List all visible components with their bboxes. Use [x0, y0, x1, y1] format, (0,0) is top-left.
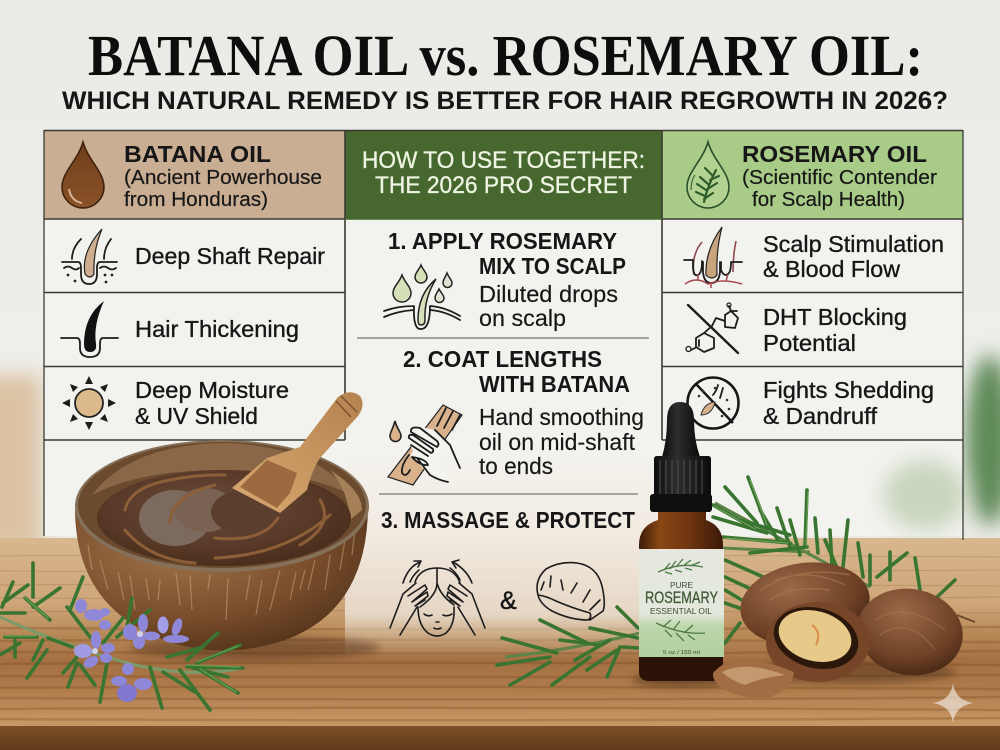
label: deep moisture: & UV Shield	[135, 403, 258, 429]
icon: scalp stimulation	[684, 227, 742, 288]
step 1 heading	[388, 228, 626, 279]
heading: batana oil: BATANA OIL	[124, 141, 271, 167]
step 2 heading	[403, 346, 630, 397]
batana column	[61, 141, 325, 430]
icon: scalp massage	[390, 560, 485, 636]
flower	[74, 631, 115, 670]
label: deep moisture: Deep Moisture	[135, 377, 289, 403]
step 2 text: oil on mid-shaft	[479, 429, 636, 455]
panel: comparison table	[44, 130, 967, 658]
wooden table	[0, 538, 1000, 750]
header: rosemary	[662, 131, 963, 219]
cap	[650, 456, 712, 512]
shea nuts	[713, 554, 970, 698]
icon: hair shaft repair	[62, 229, 117, 284]
rosemary sprigs behind bottle	[497, 477, 975, 685]
bowl rim	[75, 440, 369, 572]
flower	[123, 614, 160, 649]
rosemary sprig with flowers	[0, 563, 243, 710]
rosemary oil bottle	[632, 402, 732, 687]
pale green blur on panel	[883, 460, 967, 530]
label: deep moisture	[135, 377, 289, 429]
bowl interior	[78, 442, 366, 568]
label: scalp stimulation: Scalp Stimulation	[763, 231, 944, 257]
label: scalp stimulation: & Blood Flow	[763, 256, 900, 282]
header: how to use	[345, 131, 662, 219]
icon: drops on scalp	[384, 265, 460, 329]
icon: sparkle watermark	[933, 683, 973, 723]
heading: rosemary oil: (Scientific Contender	[742, 167, 937, 189]
step 1 text: Diluted drops	[479, 281, 618, 307]
heading: batana oil: from Honduras)	[124, 189, 268, 211]
coconut bowl with batana paste	[75, 392, 380, 660]
flower	[75, 599, 111, 630]
step 2 text: to ends	[479, 453, 553, 479]
shell piece	[713, 657, 794, 698]
heading: how to use together: THE 2026 PRO SECRET	[375, 172, 632, 199]
label: dht blocking	[763, 304, 907, 356]
ampersand: &	[500, 587, 517, 615]
heading: batana oil	[124, 141, 322, 211]
step 3 heading: 3. MASSAGE & PROTECT	[381, 507, 635, 533]
heading: how to use together: HOW TO USE TOGETHER:	[362, 147, 645, 174]
right nut	[850, 580, 970, 684]
flower	[111, 663, 152, 702]
bottle shadow	[632, 673, 732, 687]
bottle label: PURE	[670, 580, 693, 590]
centre column	[362, 147, 645, 636]
step 1 text: on scalp	[479, 305, 566, 331]
bottle label: ESSENTIAL OIL	[650, 606, 712, 616]
icon: hand smoothing oil	[388, 405, 462, 485]
top nut	[735, 554, 875, 654]
heading: rosemary oil: ROSEMARY OIL	[742, 141, 927, 167]
icon: shower cap	[537, 563, 604, 620]
label: fights shedding: & Dandruff	[763, 403, 878, 429]
step 2 text	[479, 404, 644, 479]
heading: rosemary oil	[742, 141, 937, 211]
icon: batana oil drop	[62, 142, 104, 208]
bottle label	[639, 549, 724, 657]
nut shadow	[745, 660, 955, 684]
step 2 text: Hand smoothing	[479, 404, 644, 430]
header: batana	[44, 131, 345, 219]
heading: batana oil: (Ancient Powerhouse	[124, 167, 322, 189]
label: deep shaft repair: Deep Shaft Repair	[135, 243, 325, 269]
glass body	[639, 512, 723, 681]
open nut	[766, 598, 870, 682]
heading: rosemary oil: for Scalp Health)	[752, 189, 905, 211]
label: fights shedding: Fights Shedding	[763, 377, 934, 403]
dropper bulb	[662, 402, 700, 457]
label: dht blocking: DHT Blocking	[763, 304, 907, 330]
centre column fade	[345, 440, 662, 658]
label: dht blocking: Potential	[763, 330, 856, 356]
rosemary column	[684, 141, 944, 429]
bottle label: ROSEMARY	[645, 588, 718, 607]
heading: how to use together	[362, 147, 645, 199]
step 1 heading: 1. APPLY ROSEMARY	[388, 228, 617, 254]
bowl outer shell	[75, 505, 368, 651]
bottle label: 5 oz / 150 ml	[663, 650, 700, 656]
step 1 heading: MIX TO SCALP	[479, 253, 626, 279]
bowl shadow	[130, 636, 380, 660]
step 2 heading: 2. COAT LENGTHS	[403, 346, 602, 372]
label: hair thickening: Hair Thickening	[135, 316, 299, 342]
icon: no shedding	[688, 378, 738, 428]
icon: rosemary oil drop	[687, 142, 729, 208]
batana paste	[97, 470, 351, 566]
subtitle: WHICH NATURAL REMEDY IS BETTER FOR HAIR REGROWTH IN 2026?	[62, 87, 948, 115]
step 2 heading: WITH BATANA	[479, 371, 630, 397]
wooden scoop	[232, 392, 363, 513]
step 1 text	[479, 281, 618, 331]
label: scalp stimulation	[763, 231, 944, 282]
label: fights shedding	[763, 377, 934, 429]
icon: dht blocking	[686, 303, 738, 353]
title: BATANA OIL vs. ROSEMARY OIL:	[88, 23, 923, 88]
flower	[158, 616, 189, 643]
icon: sun	[62, 376, 116, 430]
panel background	[44, 130, 963, 536]
icon: hair thickening	[61, 301, 118, 357]
